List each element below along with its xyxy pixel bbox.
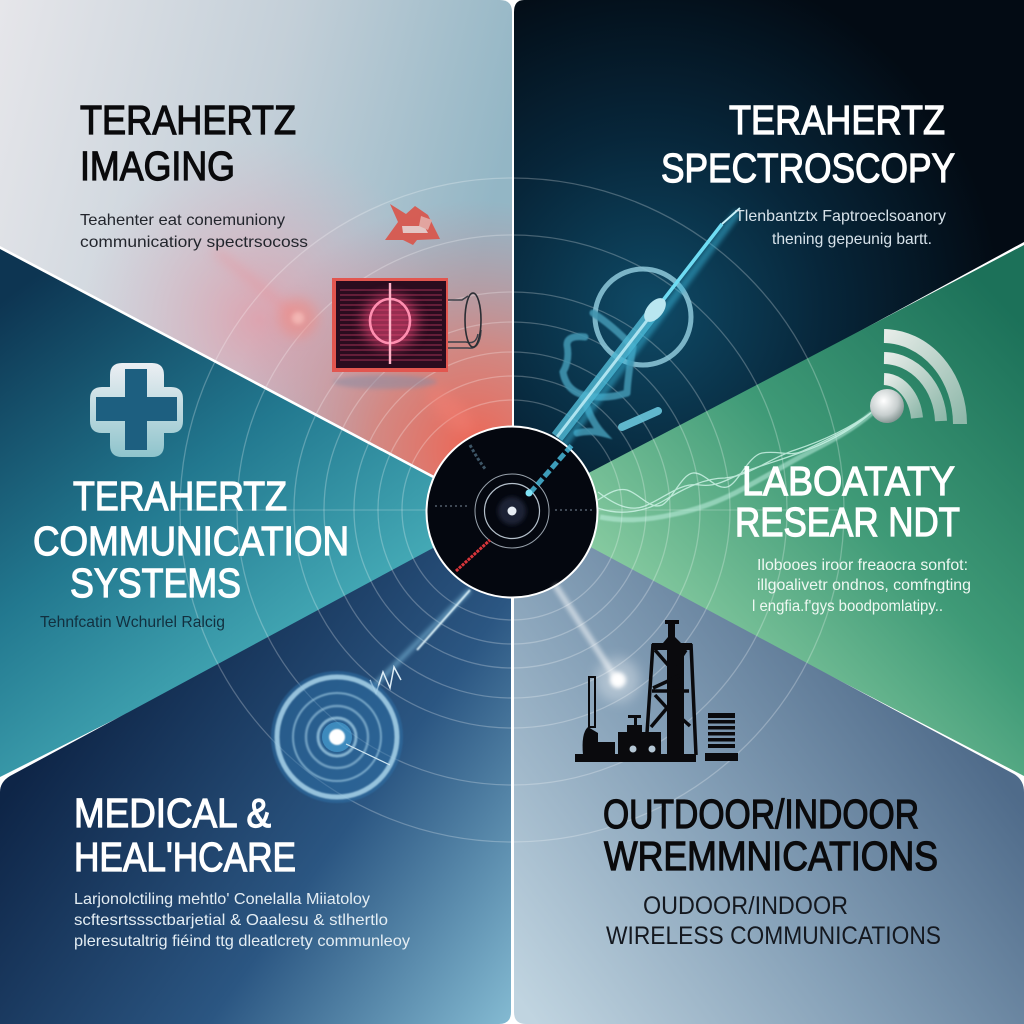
text: laboratory description: Ilobooes iroor freaocra sonfot:	[757, 557, 968, 574]
heading: medical and healthcare	[74, 790, 296, 880]
text: spectroscopy description: Tlenbantztx Faptroeclsoanory	[735, 208, 946, 225]
center radar dial	[426, 426, 598, 598]
beam: outdoor light ray	[555, 585, 640, 702]
icon: red diagnostic glyph	[385, 204, 440, 245]
heading: outdoor and indoor: OUTDOOR/INDOOR	[603, 791, 919, 837]
panel: communication systems	[0, 249, 512, 777]
text: medical description: scftesrtsssctbarjetial & Oaalesu & stlhertlo	[74, 912, 388, 929]
icon: wifi sensor with wave	[598, 336, 960, 520]
heading: terahertz spectroscopy: TERAHERTZ	[729, 97, 945, 143]
heading: terahertz imaging	[80, 97, 296, 189]
panel: laboratory research	[514, 245, 1024, 776]
icon: lens target with beam	[271, 590, 470, 803]
heading: laboratory research: LABOATATY	[742, 458, 955, 504]
heading: communication systems: TERAHERTZ	[73, 473, 287, 519]
text: communication description: Tehnfcatin Wchurlel Ralcig	[40, 614, 225, 631]
text: medical description: pleresutaltrig fiéind ttg dleatlcrety communleoy	[74, 933, 410, 950]
heading: outdoor and indoor: WREMMNICATIONS	[604, 833, 938, 879]
heading: communication systems: SYSTEMS	[70, 560, 241, 606]
text: imaging description	[80, 212, 308, 251]
heading: laboratory research	[735, 458, 960, 545]
heading: laboratory research: RESEAR NDT	[735, 499, 960, 545]
text: outdoor description: WIRELESS COMMUNICATIONS	[606, 922, 941, 950]
text: outdoor description: OUDOOR/INDOOR	[643, 892, 848, 920]
icon: industrial oil rig	[575, 620, 738, 762]
icon: spectroscopy probe	[530, 208, 740, 490]
heading: outdoor and indoor	[603, 791, 938, 879]
text: laboratory description: illgoalivetr ondnos, comfngting	[757, 577, 971, 594]
icon: medical cross	[90, 363, 183, 457]
beam: imaging pink ray	[215, 250, 318, 338]
radar rings	[180, 178, 844, 842]
beam: red glow	[420, 380, 480, 440]
panel: outdoor and indoor wireless	[514, 506, 1024, 1024]
text: medical description	[74, 891, 410, 950]
panel: terahertz spectroscopy	[514, 0, 1024, 519]
icon: imaging monitor	[332, 278, 481, 389]
text: laboratory description	[752, 557, 971, 615]
text: imaging description: communicatiory spectrsocoss	[80, 234, 308, 251]
heading: medical and healthcare: HEAL'HCARE	[74, 834, 296, 880]
heading: medical and healthcare: MEDICAL &	[74, 790, 271, 836]
heading: communication systems: COMMUNICATION	[33, 518, 349, 564]
heading: communication systems	[33, 473, 349, 606]
panel: medical and healthcare	[0, 506, 511, 1024]
heading: terahertz imaging: IMAGING	[80, 143, 235, 189]
text: laboratory description: l engfia.f'gys boodpomlatipy..	[752, 598, 943, 615]
text: outdoor description	[606, 892, 941, 950]
panel: terahertz imaging	[0, 0, 512, 517]
text: spectroscopy description	[735, 208, 946, 248]
heading: terahertz spectroscopy	[661, 97, 955, 191]
heading: terahertz spectroscopy: SPECTROSCOPY	[661, 145, 955, 191]
heading: terahertz imaging: TERAHERTZ	[80, 97, 296, 143]
text: medical description: Larjonolctiling mehtlo' Conelalla Miiatoloy	[74, 891, 370, 908]
text: imaging description: Teahenter eat conemuniony	[80, 212, 285, 229]
text: spectroscopy description: thening gepeunig bartt.	[772, 231, 932, 248]
